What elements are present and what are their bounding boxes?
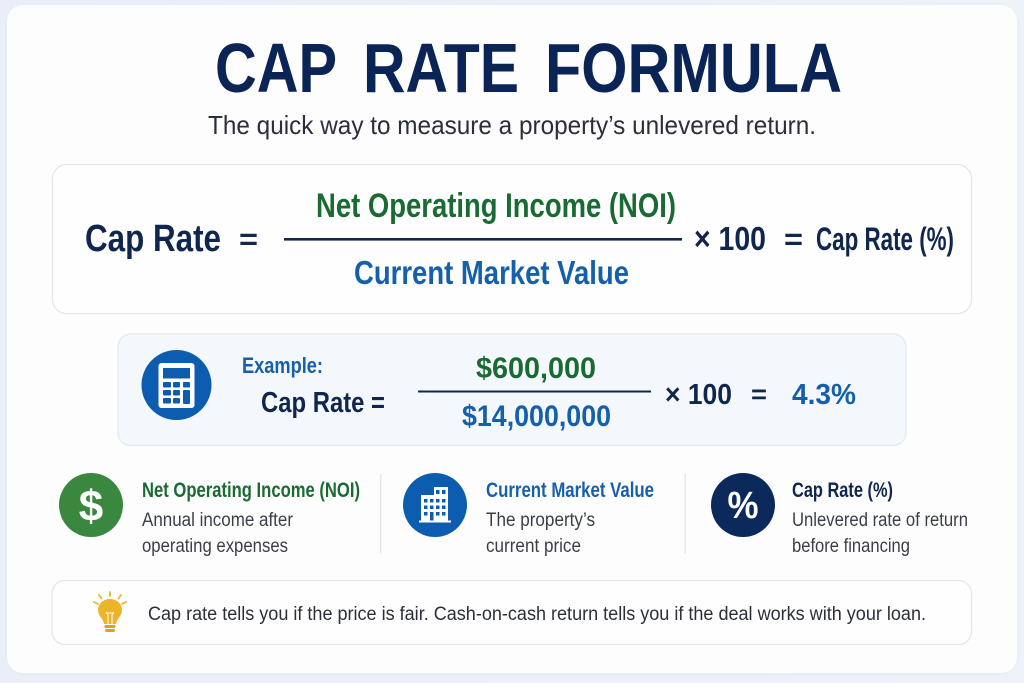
numerator: Net Operating Income (NOI) xyxy=(316,187,676,225)
example times 100: × 100 xyxy=(665,379,732,411)
market value description: The property’s xyxy=(486,510,595,531)
example left side: Cap Rate = xyxy=(261,387,385,419)
panel: example xyxy=(118,334,906,446)
denominator: Current Market Value xyxy=(354,254,629,291)
second equals sign: = xyxy=(784,223,803,256)
fraction bar xyxy=(284,238,682,241)
panel: formula xyxy=(52,164,972,314)
title: RATE xyxy=(363,29,519,107)
NOI description: operating expenses xyxy=(142,536,288,557)
title: CAP xyxy=(215,29,336,107)
tip text: Cap rate tells you if the price is fair. Cash-on-cash return tells you if the deal works with your loan. xyxy=(148,604,926,625)
example equals sign: = xyxy=(751,379,767,409)
cap rate description: Unlevered rate of return xyxy=(792,510,968,531)
example label: Example: xyxy=(242,353,323,378)
example fraction bar xyxy=(418,390,651,392)
title: FORMULA xyxy=(545,29,842,107)
icon: dollar xyxy=(59,473,123,537)
example numerator: $600,000 xyxy=(476,352,596,385)
icon: dollar: $ xyxy=(79,482,103,531)
NOI heading: Net Operating Income (NOI) xyxy=(142,479,360,502)
subtitle: The quick way to measure a property’s unlevered return. xyxy=(208,110,816,140)
icon: calculator xyxy=(142,350,212,420)
icon: percent xyxy=(711,473,775,537)
formula result: Cap Rate (%) xyxy=(816,221,954,257)
market value heading: Current Market Value xyxy=(486,479,654,502)
definition: net operating income xyxy=(59,473,360,557)
icon: light bulb xyxy=(94,592,126,632)
cap rate description: before financing xyxy=(792,536,910,557)
example result: 4.3% xyxy=(792,379,856,411)
formula left side: Cap Rate xyxy=(85,218,221,260)
equals sign: = xyxy=(239,223,258,256)
icon: building xyxy=(403,473,467,537)
NOI description: Annual income after xyxy=(142,510,294,531)
cap rate heading: Cap Rate (%) xyxy=(792,479,893,502)
definition: cap rate xyxy=(711,473,968,557)
times 100: × 100 xyxy=(694,220,766,257)
example denominator: $14,000,000 xyxy=(462,400,611,433)
definition: current market value xyxy=(403,473,654,557)
panel: tip xyxy=(52,580,972,644)
icon: percent: % xyxy=(728,485,758,527)
market value description: current price xyxy=(486,536,581,557)
